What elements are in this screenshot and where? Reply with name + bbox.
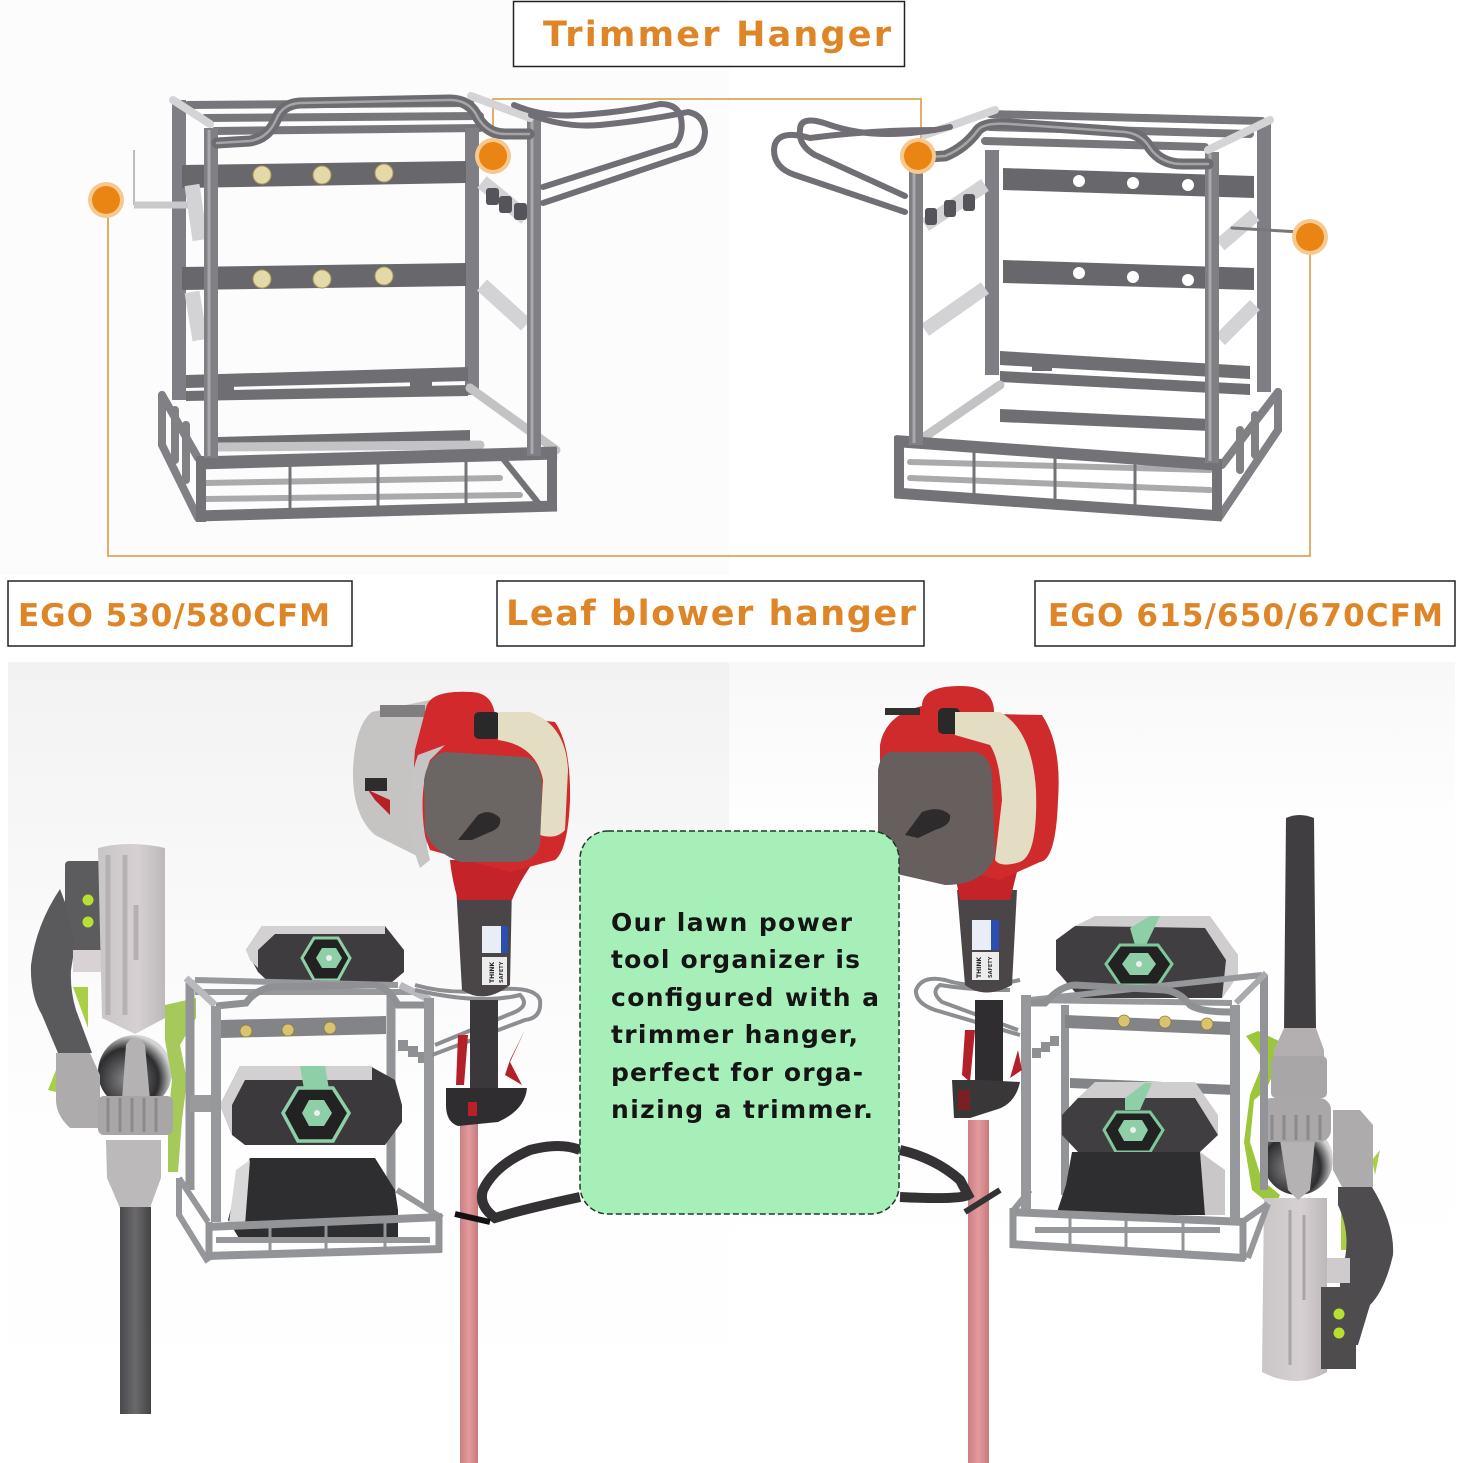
stickers — [482, 926, 508, 953]
marker: trimmer dot right — [900, 138, 936, 174]
label: EGO 530/580CFM: EGO 530/580CFM — [18, 598, 330, 634]
dark block with dots — [1321, 1287, 1356, 1369]
marker: trimmer dot left — [475, 138, 511, 174]
clasp — [1333, 1110, 1373, 1187]
back posts — [992, 120, 1264, 392]
heading: Trimmer Hanger: Trimmer Hanger — [543, 15, 892, 55]
trimmer: right — [875, 686, 1059, 1463]
ring lower — [1260, 1098, 1331, 1142]
neck handle — [456, 885, 512, 996]
knob — [938, 708, 960, 734]
lower bars — [1000, 351, 1250, 431]
dark curved arm — [31, 889, 92, 1053]
green triangle — [1341, 1150, 1380, 1250]
handle highlight — [217, 100, 529, 143]
label: EGO 615/650/670CFM — [1035, 581, 1455, 646]
grey rear body — [353, 700, 440, 860]
top rails — [188, 103, 480, 131]
ball — [1263, 1125, 1333, 1195]
silver top bars — [925, 110, 1270, 150]
red neck — [955, 860, 1020, 900]
red shell — [414, 692, 570, 872]
base side rails — [162, 395, 198, 518]
front posts — [211, 110, 534, 458]
rack back — [190, 980, 391, 1195]
ring — [98, 1096, 173, 1135]
front posts — [916, 152, 1212, 463]
silver top bars — [173, 96, 530, 124]
filter cover — [424, 752, 542, 862]
cable tie — [965, 1190, 1000, 1212]
handle highlight — [912, 124, 1208, 164]
neck handle — [957, 890, 1017, 992]
green triangles — [48, 987, 88, 1092]
filter cover — [875, 752, 995, 885]
mounting bars — [1003, 168, 1254, 290]
shaft — [975, 1000, 1003, 1090]
rack rear — [1065, 975, 1264, 1195]
base rails — [1012, 1190, 1268, 1258]
hanger bolts and brackets — [925, 194, 975, 225]
side slats — [192, 182, 526, 340]
description text: trimmer hanger, — [611, 1020, 858, 1049]
leaf blower: right — [1244, 815, 1393, 1381]
collar — [1274, 1028, 1324, 1062]
trimmer: left — [353, 692, 580, 1463]
clamp — [952, 1080, 1020, 1118]
post highlights — [914, 154, 1210, 461]
back posts — [179, 100, 472, 400]
grey trim — [408, 745, 445, 868]
cylinder — [98, 844, 165, 1034]
pole — [460, 1120, 478, 1463]
battery charger base — [228, 1158, 398, 1240]
cables — [482, 1146, 580, 1218]
pole — [120, 1207, 151, 1414]
shaft — [470, 1000, 498, 1095]
description text: perfect for orga- — [611, 1058, 863, 1087]
base front frame — [895, 436, 1222, 520]
rack base front — [1010, 1208, 1245, 1260]
base front frame — [197, 448, 557, 522]
safety text: SAFETY — [499, 961, 505, 983]
rack with batteries: left — [179, 926, 442, 1262]
trigger — [456, 1030, 525, 1085]
red neck — [450, 860, 535, 900]
frame: left rack with trimmer hanger — [134, 96, 705, 522]
hanger loop — [774, 121, 950, 212]
pole — [1284, 815, 1316, 1030]
upper battery — [246, 926, 404, 988]
cover knob — [458, 812, 500, 840]
clamp — [446, 1088, 527, 1126]
hanger bolts — [398, 1040, 428, 1063]
cables — [900, 1150, 968, 1198]
top handle — [217, 100, 529, 143]
upper battery — [1056, 926, 1238, 998]
label: Leaf blower hanger: Leaf blower hanger — [506, 594, 917, 634]
base inner rails — [910, 462, 1210, 490]
post highlights — [209, 112, 532, 456]
holes — [1073, 175, 1194, 286]
pin — [1232, 228, 1300, 232]
base rails — [179, 1178, 442, 1262]
top handle — [912, 124, 1208, 164]
label: Leaf blower hanger — [497, 581, 924, 646]
red top — [880, 686, 1059, 880]
rack front posts — [1026, 995, 1235, 1225]
label: EGO 530/580CFM — [8, 581, 352, 646]
top bar — [885, 708, 920, 715]
lower battery — [220, 1066, 402, 1145]
base side rails — [920, 385, 1000, 440]
description text: configured with a — [611, 983, 879, 1012]
sticker text: THINK — [976, 957, 983, 978]
callout: green description box — [580, 831, 899, 1214]
safety text: SAFETY — [988, 956, 994, 978]
hanger loop — [514, 104, 705, 203]
marker: right dot — [1292, 219, 1328, 255]
description text — [611, 908, 879, 1124]
cream pad — [498, 712, 568, 837]
rack base front — [206, 1214, 442, 1260]
screws — [253, 164, 393, 288]
hanger bolts — [486, 188, 527, 220]
side slats — [925, 185, 1255, 340]
ball — [98, 1035, 172, 1109]
rack top rails — [195, 980, 415, 992]
cover knob — [905, 809, 950, 838]
side tab — [73, 950, 103, 972]
marker: left dot — [88, 182, 124, 218]
clasp — [56, 1053, 100, 1128]
collar — [106, 1140, 161, 1208]
description text: tool organizer is — [611, 945, 860, 974]
lower battery — [1062, 1098, 1218, 1152]
hanger loop — [916, 979, 1020, 1035]
rack front posts — [216, 998, 429, 1222]
knob — [474, 712, 500, 739]
leaf blower: left — [31, 844, 196, 1414]
callout lines — [108, 99, 1310, 556]
description text: Our lawn power — [611, 908, 853, 937]
hex wrench — [134, 150, 188, 205]
lower bars — [186, 367, 470, 449]
dark curved arm — [1338, 1187, 1393, 1345]
side tab — [1320, 1258, 1350, 1283]
top rails — [985, 114, 1262, 147]
stickers — [972, 920, 999, 950]
frame: right rack with trimmer hanger — [774, 110, 1300, 520]
cylinder — [1262, 1198, 1327, 1381]
label: EGO 615/650/670CFM: EGO 615/650/670CFM — [1048, 598, 1443, 634]
cream pad — [955, 712, 1036, 865]
hanger loop — [415, 985, 540, 1055]
dark block with dots — [65, 861, 105, 951]
ring upper — [1271, 1056, 1327, 1098]
green bracket — [165, 998, 196, 1172]
mounting bars — [182, 161, 466, 290]
heading: Trimmer Hanger — [514, 2, 904, 66]
battery charger base — [1056, 1152, 1210, 1215]
pole — [968, 1120, 989, 1463]
rack with batteries: right — [1010, 916, 1268, 1260]
cable tie — [455, 1214, 490, 1222]
hanger bolts — [1032, 1036, 1059, 1058]
green bracket — [1244, 1031, 1281, 1208]
base front inner rails — [205, 478, 520, 499]
trigger — [962, 1030, 1022, 1082]
rack top rails — [1030, 975, 1262, 1003]
description text: nizing a trimmer. — [611, 1095, 873, 1124]
sticker text: THINK — [489, 962, 496, 983]
